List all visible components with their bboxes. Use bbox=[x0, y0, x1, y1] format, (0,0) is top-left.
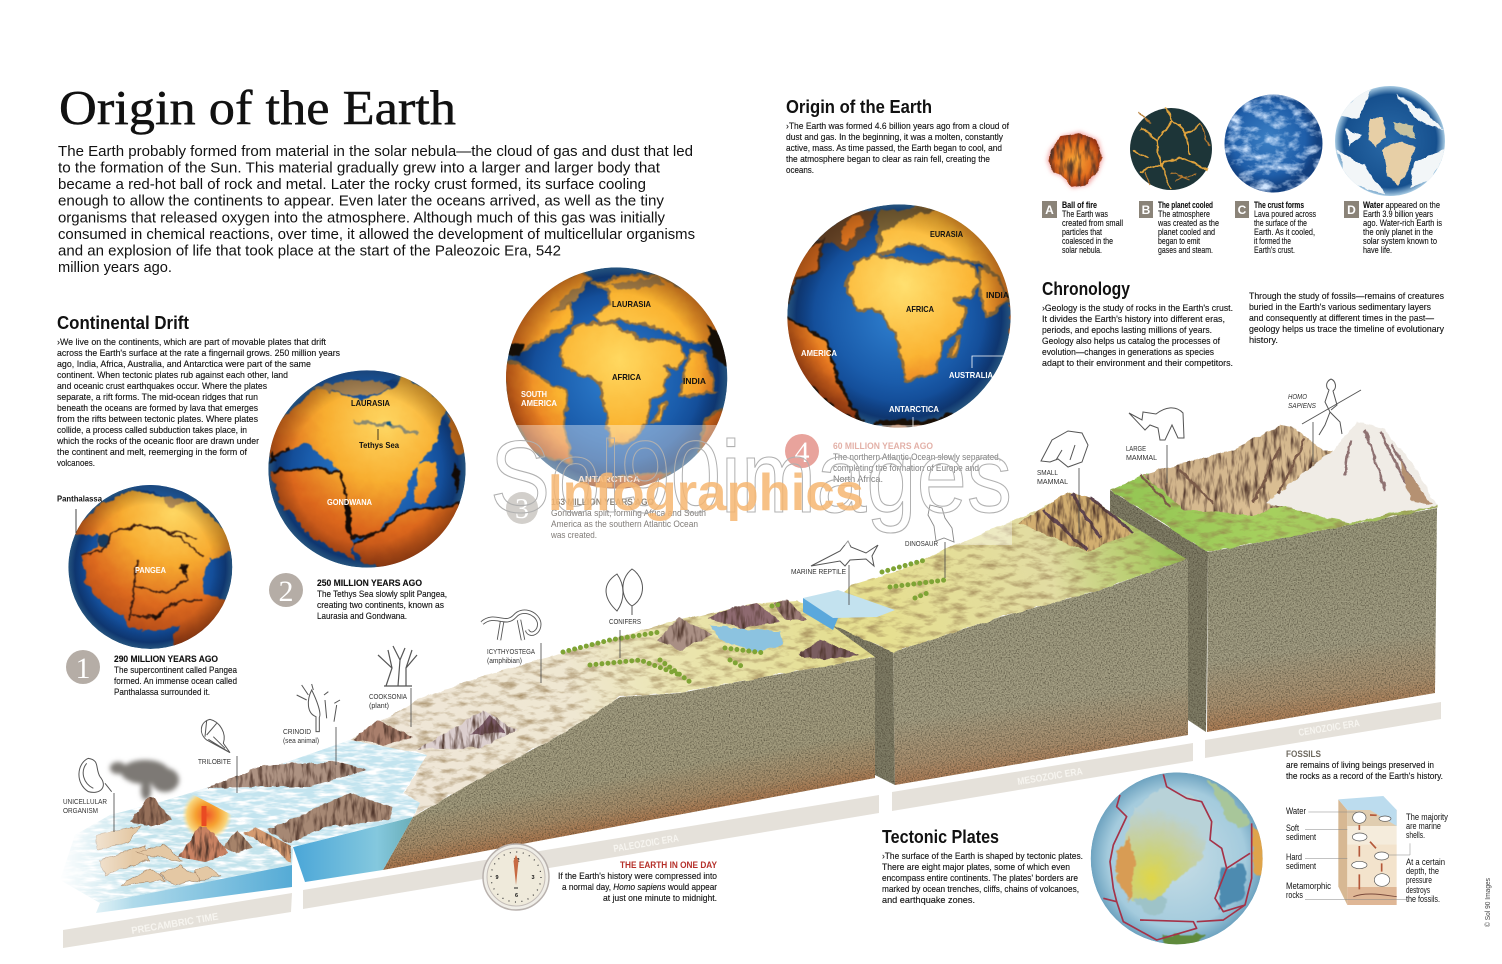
icon: planet cooling with lava cracks bbox=[1130, 108, 1212, 190]
left fade of terrain bbox=[58, 780, 133, 920]
mesozoic hills bbox=[1017, 492, 1133, 552]
text: the earth in one day: If the Earth's history were compressed into bbox=[558, 871, 717, 882]
label: Tethys Sea with leader: Tethys Sea bbox=[359, 440, 399, 450]
chronology column 1: It divides the Earth's history into different eras, bbox=[1042, 314, 1225, 325]
diagram labels: the fossils. bbox=[1406, 894, 1440, 904]
text B: began to emit bbox=[1158, 236, 1200, 246]
text: the earth in one day: THE EARTH IN ONE DAY bbox=[620, 860, 718, 871]
illustration: large mammal with label: LARGE bbox=[1126, 446, 1146, 453]
volcano with smoke bbox=[110, 760, 179, 826]
illustration: icthyostega with label: (amphibian) bbox=[487, 658, 522, 665]
era bar: Mesozoic: MESOZOIC ERA bbox=[1017, 766, 1084, 788]
intro text block bbox=[58, 144, 695, 276]
chronology column 1: adapt to their environment and their competitors. bbox=[1042, 358, 1233, 369]
text: the earth in one day bbox=[558, 860, 718, 904]
text B bbox=[1157, 200, 1219, 255]
caption text 1: The supercontinent called Pangea bbox=[114, 665, 238, 676]
chronology column 1 bbox=[1042, 303, 1233, 369]
illustration: small mammal with label: SMALL bbox=[1037, 470, 1058, 477]
diagram labels: rocks bbox=[1286, 890, 1303, 900]
illustration: crinoid with label bbox=[283, 684, 340, 765]
lake bbox=[803, 590, 895, 630]
illustration: icthyostega with label bbox=[482, 612, 541, 683]
intro text block: enough to allow the continents to appear. Even later the oceans arrived, as well as the tiny bbox=[58, 194, 665, 210]
caption B bbox=[1139, 200, 1219, 255]
globe 1: Pangea bbox=[57, 483, 237, 650]
label: Antarctica, faded: ANTARCTICA bbox=[578, 474, 640, 484]
tectonic paragraph: and earthquake zones. bbox=[882, 895, 975, 906]
text A: The Earth was bbox=[1062, 209, 1108, 219]
globe: tectonic plates bbox=[1091, 772, 1265, 947]
text: the earth in one day: at just one minute to midnight. bbox=[603, 893, 717, 904]
diagram labels: At a certain bbox=[1406, 857, 1445, 867]
text A bbox=[1062, 200, 1123, 255]
letter box C: C bbox=[1238, 203, 1247, 217]
panel: origin of the earth text bbox=[786, 97, 1009, 176]
illustration: cooksonia with label bbox=[369, 646, 417, 727]
text B: was created as the bbox=[1157, 218, 1219, 228]
rock face bbox=[383, 657, 875, 870]
label: Australia with leader: AUSTRALIA bbox=[949, 370, 993, 380]
caption text 4 bbox=[833, 441, 1001, 485]
caption text 3: 163 MILLION YEARS AGO bbox=[551, 497, 654, 508]
sea surface bbox=[190, 740, 427, 847]
diagram labels: shells. bbox=[1406, 830, 1425, 840]
watermark veil over caption area bbox=[487, 425, 1012, 545]
diagram labels: pressure bbox=[1406, 875, 1432, 885]
text A: solar nebula. bbox=[1062, 245, 1102, 255]
origin paragraph: the atmosphere began to clear as rain fell, creating the bbox=[786, 154, 990, 165]
number badge 2 bbox=[269, 573, 303, 608]
illustration: large mammal with label: MAMMAL bbox=[1126, 455, 1157, 462]
caption text 2: creating two continents, known as bbox=[317, 600, 444, 611]
fossils description: are remains of living beings preserved in bbox=[1286, 760, 1434, 771]
tectonic paragraph: There are eight major plates, some of which even bbox=[882, 862, 1070, 873]
heading: continental drift: Continental Drift bbox=[57, 313, 189, 333]
terrain: Cenozoic block bbox=[1110, 422, 1437, 732]
continental drift paragraph: continent. When tectonic plates rub against each other, land bbox=[57, 370, 288, 381]
continental drift paragraph bbox=[56, 337, 340, 469]
text D: solar system known to bbox=[1363, 236, 1437, 246]
era bar: Mesozoic bbox=[892, 743, 1193, 811]
caption text 3 bbox=[550, 497, 706, 541]
ridges bbox=[207, 600, 860, 843]
icon: blue crust planet bbox=[1224, 94, 1322, 192]
illustration: trilobite with label: TRILOBITE bbox=[198, 759, 231, 766]
chronology column 2: Through the study of fossils—remains of creatures bbox=[1249, 291, 1444, 302]
era bar: Paleozoic: PALEOZOIC ERA bbox=[613, 833, 680, 855]
text B: gases and steam. bbox=[1158, 245, 1213, 255]
text D: the only planet in the bbox=[1363, 227, 1433, 237]
label: Tethys Sea with leader bbox=[359, 429, 399, 450]
diagram labels: sediment bbox=[1286, 861, 1316, 871]
label: South America bbox=[521, 389, 557, 408]
caption text 4: 60 MILLION YEARS AGO bbox=[833, 441, 933, 452]
letter box D: D bbox=[1347, 203, 1356, 217]
caption text 4: The northern Atlantic Ocean slowly separated, bbox=[833, 452, 1001, 463]
illustration: small mammal with label bbox=[1037, 431, 1088, 533]
caption text 3: was created. bbox=[550, 530, 597, 541]
diagram labels: The majority bbox=[1406, 812, 1449, 822]
origin paragraph: dust and gas. In the beginning, it was a molten, constantly bbox=[786, 132, 1003, 143]
era bar: Cenozoic: CENOZOIC ERA bbox=[1298, 718, 1361, 739]
text D: Water appeared on the bbox=[1363, 200, 1440, 210]
diagram labels: destroys bbox=[1406, 885, 1430, 895]
text C: Earth's crust. bbox=[1254, 245, 1295, 255]
intro text block: million years ago. bbox=[58, 260, 172, 276]
era bars bbox=[63, 702, 1441, 948]
illustration: conifers with label: CONIFERS bbox=[609, 619, 641, 626]
erupting volcano bbox=[178, 790, 232, 862]
text C: Earth. As it cooled, bbox=[1254, 227, 1315, 237]
illustration: unicellular organism with label bbox=[63, 758, 114, 832]
label: Africa: AFRICA bbox=[906, 304, 934, 314]
text A: Ball of fire bbox=[1062, 200, 1097, 210]
label: Africa: AFRICA bbox=[612, 372, 641, 382]
chronology column 2: and consequently at different times in the past— bbox=[1249, 313, 1434, 324]
caption text 1: Panthalassa surrounded it. bbox=[114, 687, 210, 698]
era bar: Cenozoic bbox=[1205, 702, 1441, 758]
chronology column 2 bbox=[1249, 291, 1444, 346]
panel: chronology bbox=[1042, 279, 1444, 369]
continental drift paragraph: separate, a rift forms. The mid-ocean ridges that run bbox=[57, 392, 258, 403]
step 4 caption bbox=[785, 434, 1001, 485]
text C: The crust forms bbox=[1254, 200, 1304, 210]
title: Origin of the Earth bbox=[59, 80, 456, 135]
label: Pangea: PANGEA bbox=[135, 565, 166, 575]
icon: water planet bbox=[1335, 86, 1446, 196]
land surface bbox=[350, 600, 875, 817]
terrain: Mesozoic block bbox=[803, 492, 1188, 785]
heading: origin of the earth: Origin of the Earth bbox=[786, 97, 932, 117]
continental drift paragraph: beneath the oceans are formed by lava that emerges bbox=[57, 403, 258, 414]
label: South America: AMERICA bbox=[521, 398, 557, 408]
intro text block: and an explosion of life that took place at the start of the Paleozoic Era, 542 bbox=[58, 243, 561, 259]
panel: fossils bbox=[1286, 748, 1449, 905]
label: South America: SOUTH bbox=[521, 389, 547, 399]
fossil cross-section diagram bbox=[1305, 796, 1410, 905]
text B: The atmosphere bbox=[1158, 209, 1210, 219]
letter box B: B bbox=[1142, 203, 1151, 217]
panel: tectonic plates bbox=[882, 827, 1083, 906]
label: Laurasia: LAURASIA bbox=[351, 398, 390, 408]
diagram labels: sediment bbox=[1286, 832, 1316, 842]
intro text block: became a red-hot ball of rock and metal. Later the rocky crust formed, its surface cooling bbox=[58, 177, 646, 193]
illustration: homo sapiens with label: HOMO bbox=[1288, 394, 1307, 401]
diagram labels: Soft bbox=[1286, 823, 1299, 833]
chronology column 2: buried in the Earth's various sedimentary layers bbox=[1249, 302, 1431, 313]
caption D bbox=[1344, 200, 1443, 255]
fossils description bbox=[1286, 760, 1443, 782]
continental drift paragraph: from the rifts between tectonic plates. Where plates bbox=[57, 414, 258, 425]
caption text 1: 290 MILLION YEARS AGO bbox=[114, 654, 218, 665]
illustration: cooksonia with label: COOKSONIA bbox=[369, 694, 407, 701]
globe 4: modern continents bbox=[787, 204, 1011, 428]
label: Gondwana: GONDWANA bbox=[327, 497, 372, 507]
diagram labels: Metamorphic bbox=[1286, 881, 1332, 891]
label: India: INDIA bbox=[986, 290, 1009, 300]
era bar: Paleozoic bbox=[303, 795, 879, 909]
number badge 4 bbox=[785, 434, 819, 469]
watermark: Sol90images: Sol90images bbox=[490, 420, 1012, 534]
caption text 2: 250 MILLION YEARS AGO bbox=[317, 578, 422, 589]
text C: it formed the bbox=[1254, 236, 1291, 246]
continental drift paragraph: ›We live on the continents, which are part of movable plates that drift bbox=[57, 337, 326, 348]
step 3 caption bbox=[506, 492, 706, 541]
illustration: trilobite with label bbox=[198, 719, 237, 793]
chronology column 1: periods, and epochs lasting millions of years. bbox=[1042, 325, 1212, 336]
origin paragraph: active, mass. As time passed, the Earth began to cool, and bbox=[786, 143, 1002, 154]
tectonic paragraph: ›The surface of the Earth is shaped by tectonic plates. bbox=[882, 851, 1083, 862]
terrain: Precambrian block bbox=[60, 760, 293, 913]
illustration: homo sapiens with label bbox=[1288, 379, 1361, 462]
illustration: cooksonia with label: (plant) bbox=[369, 703, 389, 710]
copyright credit: © Sol 90 Images bbox=[1484, 878, 1492, 927]
text D bbox=[1363, 200, 1443, 255]
globe 3: Africa and South America bbox=[500, 267, 733, 495]
chronology column 1: evolution—changes in generations as species bbox=[1042, 347, 1214, 358]
caption text 1 bbox=[114, 654, 238, 698]
icon: clock: 6 bbox=[515, 893, 518, 899]
illustration: large mammal with label bbox=[1126, 408, 1184, 483]
text A: created from small bbox=[1062, 218, 1123, 228]
intro text block: consumed in chemical reactions, over time, it allowed the development of multicellular organisms bbox=[58, 227, 695, 243]
intro text block: The Earth probably formed from material in the solar nebula—the cloud of gas and dust that led bbox=[58, 144, 693, 160]
intro text block: organisms that released oxygen into the atmosphere. Although much of this gas was initially bbox=[58, 210, 666, 226]
continental drift paragraph: which the rocks of the oceanic floor are drawn under bbox=[56, 436, 260, 447]
icon: clock: 3 bbox=[531, 875, 535, 881]
tectonic paragraph: marked by ocean trenches, cliffs, chains of volcanoes, bbox=[882, 884, 1079, 895]
chronology column 2: history. bbox=[1249, 335, 1278, 346]
illustration: crinoid with label: (sea animal) bbox=[283, 738, 319, 745]
text: the earth in one day: a normal day, Homo sapiens would appear bbox=[562, 882, 718, 893]
caption C bbox=[1235, 200, 1316, 255]
number badge 1: 1 bbox=[76, 652, 90, 685]
label: Panthalassa with leader: Panthalassa bbox=[57, 494, 102, 504]
text C: Lava poured across bbox=[1254, 209, 1316, 219]
fossils description: the rocks as a record of the Earth's history. bbox=[1286, 771, 1443, 782]
origin paragraph bbox=[786, 121, 1009, 176]
icon: clock: 12 bbox=[513, 858, 520, 864]
illustration: small mammal with label: MAMMAL bbox=[1037, 479, 1068, 486]
illustration: icthyostega with label: ICYTHYOSTEGA bbox=[487, 649, 535, 656]
diagram labels: are marine bbox=[1406, 821, 1441, 831]
caption text 2: Laurasia and Gondwana. bbox=[317, 611, 407, 622]
illustration: homo sapiens with label: SAPIENS bbox=[1288, 403, 1316, 410]
caption A bbox=[1042, 200, 1123, 255]
caption text 4: completing the formation of Europe and bbox=[833, 463, 979, 474]
text C bbox=[1254, 200, 1316, 255]
caption text 4: North Africa. bbox=[833, 474, 883, 485]
number badge 3: 3 bbox=[515, 494, 529, 525]
caption text 3: America as the southern Atlantic Ocean bbox=[551, 519, 698, 530]
era bar: Precambrian bbox=[63, 893, 292, 948]
origin paragraph: oceans. bbox=[786, 165, 814, 176]
tectonic paragraph: encompass entire continents. The plates' borders are bbox=[882, 873, 1078, 884]
illustration: unicellular organism with label: UNICELLULAR bbox=[63, 799, 107, 806]
globe 2: Laurasia and Gondwana bbox=[267, 360, 470, 570]
illustration: dinosaur with label: DINOSAUR bbox=[905, 541, 938, 548]
illustration: marine reptile with label bbox=[791, 541, 878, 605]
continental drift paragraph: across the Earth's surface at the rate a fingernail grows. 250 million years bbox=[57, 348, 340, 359]
text D: ago. Water-rich Earth is bbox=[1363, 218, 1443, 228]
continental drift paragraph: the continent and melt, reemerging in the form of bbox=[57, 447, 247, 458]
step 1 caption bbox=[66, 650, 238, 698]
terrain: Paleozoic block bbox=[190, 600, 875, 882]
text D: Earth 3.9 billion years bbox=[1363, 209, 1433, 219]
letter box A: A bbox=[1045, 203, 1054, 217]
step 2 caption bbox=[269, 573, 447, 622]
caption text 2 bbox=[317, 578, 447, 622]
illustration: crinoid with label: CRINOID bbox=[283, 729, 311, 736]
text B: The planet cooled bbox=[1158, 200, 1213, 210]
label: Eurasia: EURASIA bbox=[930, 229, 963, 239]
era bar: Precambrian: PRECAMBRIC TIME bbox=[131, 912, 220, 937]
continental drift paragraph: and oceanic crust earthquakes occur. Where the plates bbox=[57, 381, 267, 392]
panel: continental drift text bbox=[56, 313, 340, 469]
icon: clock: 9 bbox=[495, 875, 499, 881]
number badge 2: 2 bbox=[278, 575, 294, 608]
text B: planet cooled and bbox=[1158, 227, 1215, 237]
caption text 2: The Tethys Sea slowly split Pangea, bbox=[317, 589, 447, 600]
icon: ball of fire bbox=[1047, 132, 1103, 188]
diagram labels: Water bbox=[1286, 806, 1306, 816]
origin paragraph: ›The Earth was formed 4.6 billion years ago from a cloud of bbox=[786, 121, 1009, 132]
heading: chronology: Chronology bbox=[1042, 279, 1130, 299]
cenozoic mountains bbox=[1140, 422, 1437, 523]
label: Antarctica with leader: ANTARCTICA bbox=[889, 404, 939, 414]
number badge 4: 4 bbox=[794, 436, 810, 469]
text A: coalesced in the bbox=[1062, 236, 1113, 246]
number badge 3 bbox=[506, 492, 538, 525]
text D: have life. bbox=[1363, 245, 1392, 255]
watermark: Infographics: Infographics bbox=[548, 464, 864, 522]
diagram labels: Hard bbox=[1286, 852, 1302, 862]
diagram labels bbox=[1286, 806, 1449, 904]
chronology column 1: ›Geology is the study of rocks in the Earth's crust. bbox=[1042, 303, 1233, 314]
fossils heading: FOSSILS bbox=[1286, 748, 1321, 759]
diagram labels: depth, the bbox=[1406, 866, 1439, 876]
text C: the surface of the bbox=[1254, 218, 1307, 228]
label: Australia with leader bbox=[949, 356, 1007, 380]
continental drift paragraph: volcanoes. bbox=[57, 458, 95, 469]
conifer forest bbox=[563, 604, 782, 682]
label: Panthalassa with leader bbox=[57, 494, 102, 533]
label: Laurasia: LAURASIA bbox=[612, 299, 651, 309]
illustration: dinosaur with label bbox=[905, 505, 954, 578]
continental drift paragraph: collide, a process called subduction takes place, in bbox=[57, 425, 247, 436]
illustration: marine reptile with label: MARINE REPTILE bbox=[791, 569, 846, 576]
caption text 1: formed. An immense ocean called bbox=[114, 676, 237, 687]
illustration: unicellular organism with label: ORGANISM bbox=[63, 808, 98, 815]
illustration: conifers with label bbox=[606, 569, 642, 658]
icon: clock bbox=[483, 844, 549, 910]
text A: particles that bbox=[1062, 227, 1102, 237]
chronology column 2: geology helps us trace the timeline of evolutionary bbox=[1249, 324, 1444, 335]
heading: tectonic plates: Tectonic Plates bbox=[882, 827, 999, 847]
chronology column 1: Geology also helps us catalog the processes of bbox=[1042, 336, 1220, 347]
label: India: INDIA bbox=[683, 376, 706, 386]
label: America: AMERICA bbox=[801, 348, 837, 358]
intro text block: to the formation of the Sun. This material gradually grew into a larger and larger body that bbox=[58, 161, 660, 177]
number badge 1 bbox=[66, 650, 100, 685]
tectonic paragraph bbox=[882, 851, 1083, 906]
caption text 3: Gondwana split, forming Africa and South bbox=[551, 508, 706, 519]
label: Antarctica with leader bbox=[889, 404, 939, 427]
continental drift paragraph: ago, India, Africa, Australia, and Antarctica were part of the same bbox=[57, 359, 311, 370]
